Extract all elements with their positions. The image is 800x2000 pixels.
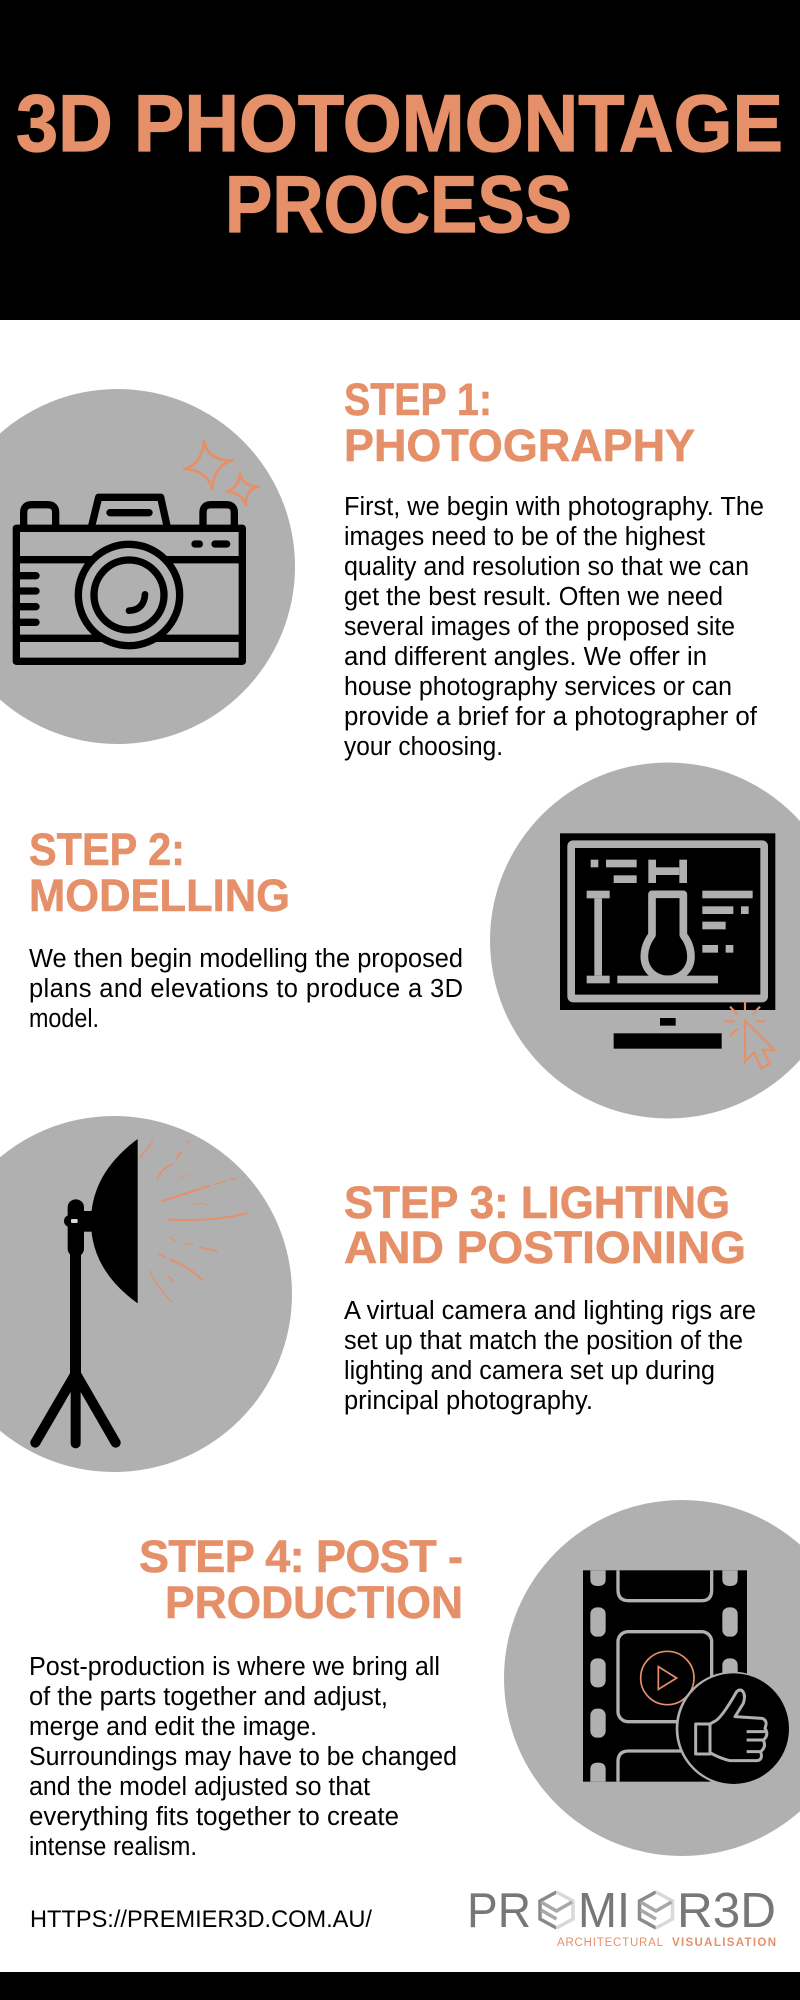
circle backdrop step 1 xyxy=(0,389,295,744)
icon: light rays xyxy=(140,1141,247,1302)
circle backdrop step 4 xyxy=(504,1500,800,1856)
logo tagline: ARCHITECTURAL xyxy=(557,1937,664,1949)
heading step 4: PRODUCTION xyxy=(165,1577,463,1628)
body text step 2 xyxy=(29,945,463,1033)
body text step 4 xyxy=(29,1653,457,1861)
logo: Premier3D: R3D xyxy=(677,1884,776,1938)
title: PROCESS xyxy=(225,160,572,250)
circle backdrop step 3 xyxy=(0,1116,292,1472)
heading step 3: STEP 3: LIGHTING xyxy=(344,1177,730,1228)
body text step 1: provide a brief for a photographer of xyxy=(344,703,758,731)
icon: studio light xyxy=(35,1139,247,1443)
logo tagline xyxy=(557,1937,776,1949)
body text step 4: intense realism. xyxy=(29,1833,197,1861)
website url: HTTPS://PREMIER3D.COM.AU/ xyxy=(30,1906,372,1933)
heading step 2 xyxy=(29,824,290,921)
logo: Premier3D: MI xyxy=(578,1884,630,1938)
body text step 4: of the parts together and adjust, xyxy=(29,1683,388,1711)
body text step 3: lighting and camera set up during xyxy=(344,1357,715,1385)
body text step 1: quality and resolution so that we can xyxy=(344,553,749,581)
icon: clicking cursor xyxy=(724,1001,774,1068)
body text step 3: principal photography. xyxy=(344,1387,593,1415)
body text step 1: get the best result. Often we need xyxy=(344,583,723,611)
body text step 3: set up that match the position of the xyxy=(344,1327,743,1355)
body text step 4: merge and edit the image. xyxy=(29,1713,317,1741)
heading step 2: MODELLING xyxy=(29,870,290,921)
footer band xyxy=(0,1972,800,2000)
logo: Premier3D: PR xyxy=(467,1884,531,1938)
heading step 3 xyxy=(344,1177,746,1273)
body text step 3 xyxy=(344,1297,756,1415)
body text step 2: model. xyxy=(29,1005,99,1033)
icon: logo hexagons xyxy=(540,1892,672,1928)
icon: film strip with thumbs up xyxy=(583,1570,789,1784)
body text step 4: Post-production is where we bring all xyxy=(29,1653,440,1681)
heading step 1: STEP 1: xyxy=(344,374,492,425)
panel: step 1 photography xyxy=(0,374,764,761)
body text step 3: A virtual camera and lighting rigs are xyxy=(344,1297,756,1325)
panel: step 4 post-production xyxy=(29,1500,800,1861)
heading step 3: AND POSTIONING xyxy=(344,1222,746,1273)
body text step 4: and the model adjusted so that xyxy=(29,1773,370,1801)
body text step 1: several images of the proposed site xyxy=(344,613,735,641)
header band xyxy=(0,0,800,320)
heading step 4 xyxy=(139,1531,463,1628)
icon: camera xyxy=(16,441,258,661)
body text step 2: We then begin modelling the proposed xyxy=(29,945,463,973)
heading step 4: STEP 4: POST - xyxy=(139,1531,463,1582)
icon: monitor with blueprint xyxy=(560,833,775,1068)
heading step 1 xyxy=(344,374,695,471)
panel: step 3 lighting xyxy=(0,1116,756,1472)
panel: step 2 modelling xyxy=(29,762,800,1118)
logo: Premier3D xyxy=(467,1884,776,1949)
body text step 4: everything fits together to create xyxy=(29,1803,399,1831)
title xyxy=(16,79,783,250)
heading step 1: PHOTOGRAPHY xyxy=(344,420,695,471)
body text step 1: and different angles. We offer in xyxy=(344,643,707,671)
body text step 1: house photography services or can xyxy=(344,673,732,701)
circle backdrop step 2 xyxy=(490,762,800,1118)
icon: sparkles xyxy=(184,441,258,505)
logo tagline: VISUALISATION xyxy=(672,1937,776,1949)
body text step 1 xyxy=(344,493,764,761)
body text step 1: your choosing. xyxy=(344,733,503,761)
body text step 2: plans and elevations to produce a 3D xyxy=(29,975,463,1003)
body text step 1: First, we begin with photography. The xyxy=(344,493,764,521)
heading step 2: STEP 2: xyxy=(29,824,185,875)
body text step 4: Surroundings may have to be changed xyxy=(29,1743,457,1771)
body text step 1: images need to be of the highest xyxy=(344,523,705,551)
